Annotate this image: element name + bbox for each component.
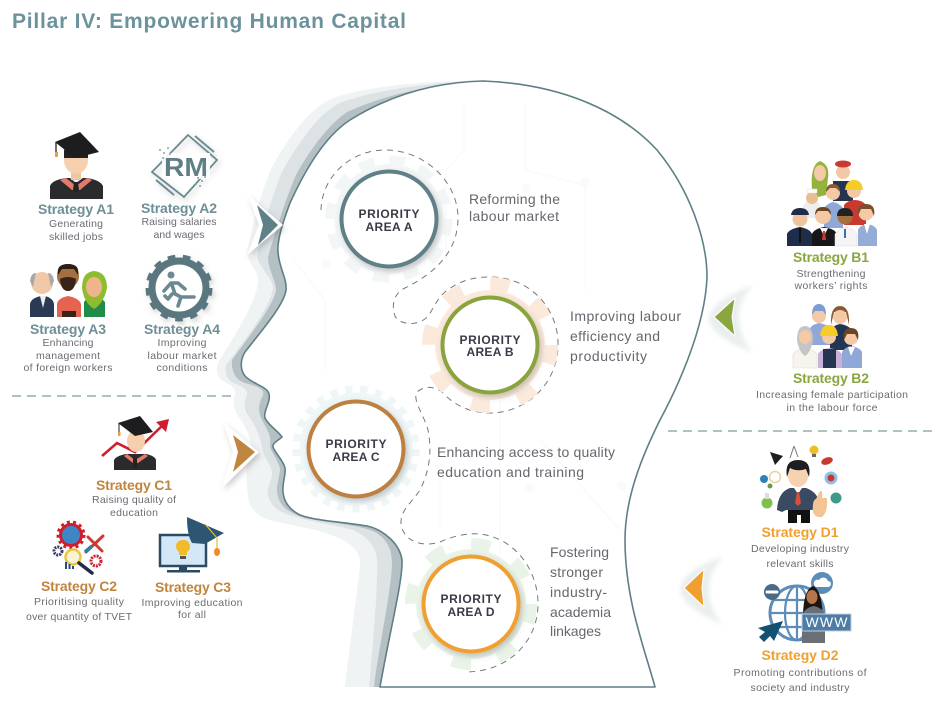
arrow B: [709, 285, 753, 353]
label D: PRIORITY: [440, 592, 502, 606]
label A3: Strategy A3: [30, 321, 106, 337]
text A1: [49, 218, 103, 243]
panel: strategy A4: [144, 259, 220, 374]
arrow C: [222, 422, 259, 488]
text A2: Raising salaries: [142, 216, 216, 228]
panel: strategy C2: [26, 522, 133, 623]
text C3: for all: [178, 609, 206, 621]
text C1: Raising quality of: [92, 494, 176, 506]
description A: Reforming the: [469, 191, 560, 207]
text C1: education: [110, 507, 158, 519]
text C2: [26, 596, 133, 623]
dashed connector path: [321, 150, 558, 672]
icon: RM document: RM: [164, 152, 208, 182]
description C: education and training: [437, 464, 584, 480]
head silhouette: [217, 81, 707, 687]
label A: [358, 207, 420, 234]
text A4: [148, 337, 217, 374]
text A4: Improving: [158, 337, 207, 349]
label A2: Strategy A2: [141, 200, 217, 216]
text C2: over quantity of TVET: [26, 611, 133, 623]
panel: strategy C1: [92, 416, 176, 519]
label B: [460, 333, 520, 359]
text D1: Developing industry: [751, 543, 850, 555]
circle A: [342, 172, 436, 266]
panel: strategy A3: [24, 264, 112, 374]
label B: AREA B: [466, 345, 514, 359]
description B: productivity: [570, 348, 647, 364]
description D: [550, 544, 611, 639]
text A3: of foreign workers: [24, 362, 112, 374]
text C1: [92, 494, 176, 519]
panel: priority area B: [432, 287, 681, 403]
label C2: Strategy C2: [41, 578, 117, 594]
panel: strategy B2: [756, 304, 908, 414]
description D: stronger: [550, 564, 603, 580]
icon: gears, tools and magnifier: [54, 522, 103, 573]
text A2: and wages: [154, 229, 204, 241]
icon: gear with runner: [150, 259, 208, 317]
label C3: Strategy C3: [155, 579, 231, 595]
panel: priority area D: [415, 544, 611, 660]
panel: priority area A: [333, 163, 560, 275]
description A: labour market: [469, 208, 559, 224]
label A4: Strategy A4: [144, 321, 220, 337]
text C2: Prioritising quality: [34, 596, 125, 608]
text D2: [734, 667, 867, 694]
icon: monitor with lightbulb and cap: [160, 517, 224, 572]
label C: [326, 437, 386, 464]
text B2: Increasing female participation: [756, 389, 908, 401]
text D2: society and industry: [750, 682, 850, 694]
panel: strategy D2: [734, 572, 867, 694]
label D: [440, 592, 502, 619]
text C3: [142, 597, 243, 621]
circle C: [308, 402, 404, 496]
gear C: [299, 392, 413, 506]
label D1: Strategy D1: [762, 524, 839, 540]
text A1: skilled jobs: [49, 231, 103, 243]
label C: PRIORITY: [326, 437, 386, 451]
label A: PRIORITY: [358, 207, 420, 221]
text B1: workers’ rights: [794, 280, 868, 292]
description B: [570, 308, 681, 364]
description D: academia: [550, 604, 611, 620]
panel: priority area C: [299, 392, 615, 506]
title: Pillar IV: Empowering Human Capital: [12, 10, 406, 33]
panel: strategy A1: [38, 132, 114, 243]
text C3: Improving education: [142, 597, 243, 609]
text B1: Strengthening: [796, 268, 866, 280]
label B: PRIORITY: [460, 333, 520, 347]
text B2: in the labour force: [786, 402, 878, 414]
label B2: Strategy B2: [793, 370, 869, 386]
label D2: Strategy D2: [762, 647, 839, 663]
panel: strategy A2: [141, 135, 217, 241]
description B: efficiency and: [570, 328, 660, 344]
text A4: conditions: [156, 362, 208, 374]
circle D: [424, 556, 518, 652]
icon: group of workers: [787, 160, 877, 246]
icon: group of women workers: [793, 304, 862, 368]
text A3: management: [36, 350, 100, 362]
text D1: [751, 543, 850, 570]
description A: [469, 191, 560, 224]
description D: Fostering: [550, 544, 609, 560]
text A2: [142, 216, 216, 241]
text D1: relevant skills: [766, 558, 834, 570]
description D: industry-: [550, 584, 607, 600]
text D2: Promoting contributions of: [734, 667, 867, 679]
label C1: Strategy C1: [96, 477, 172, 493]
text A3: [24, 337, 112, 374]
label D: AREA D: [448, 605, 495, 619]
icon: businessman with skill symbols: [760, 446, 842, 523]
description C: [437, 444, 615, 480]
icon: globe, woman and www: WWW: [806, 614, 848, 630]
icon: graduate with rising arrow: [102, 416, 169, 470]
panel: strategy B1: [787, 160, 877, 292]
gear A: [333, 163, 445, 275]
text A3: Enhancing: [42, 337, 94, 349]
description B: Improving labour: [570, 308, 681, 324]
circle B: [442, 298, 538, 392]
gear D: [415, 548, 527, 660]
text A1: Generating: [49, 218, 103, 230]
text A4: labour market: [148, 350, 217, 362]
label A1: Strategy A1: [38, 201, 114, 217]
label B1: Strategy B1: [793, 249, 869, 265]
text B2: [756, 389, 908, 414]
label C: AREA C: [332, 450, 380, 464]
panel: strategy C3: [142, 517, 243, 621]
text B1: [794, 268, 868, 292]
icon: graduate: [50, 132, 103, 199]
icon: three workers: [30, 264, 107, 317]
panel: strategy D1: [751, 446, 850, 570]
arrow D: [680, 556, 723, 625]
description D: linkages: [550, 623, 601, 639]
label A: AREA A: [366, 220, 413, 234]
gear B: [432, 287, 548, 403]
arrow A: [247, 195, 283, 255]
description C: Enhancing access to quality: [437, 444, 615, 460]
